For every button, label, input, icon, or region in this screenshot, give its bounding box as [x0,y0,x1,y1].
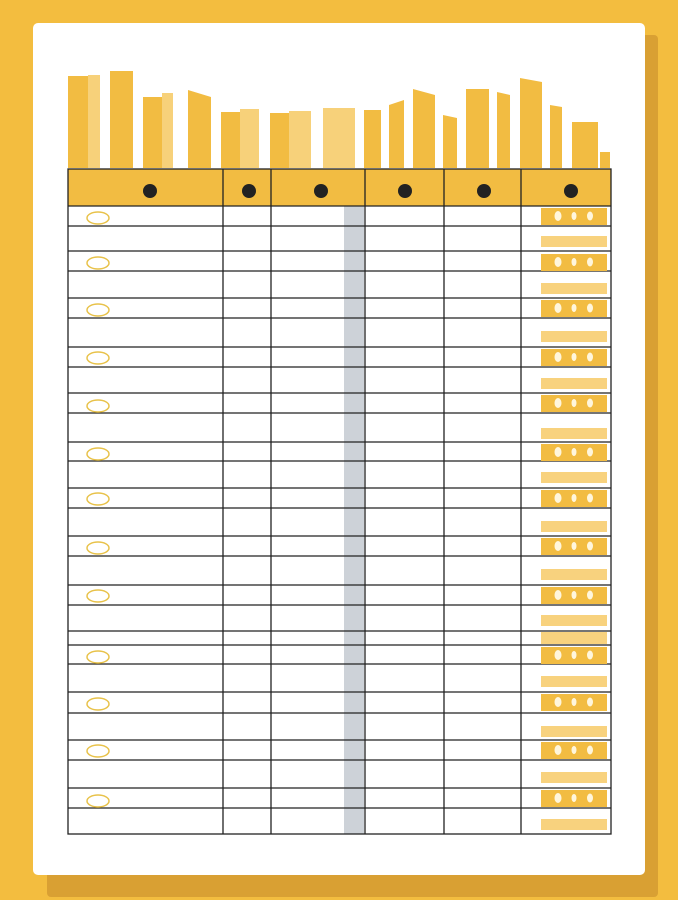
right column badges [541,208,607,830]
gray column band [344,206,364,834]
row icons: ovals [87,212,109,807]
table rows [68,169,611,834]
bar chart skyline [68,71,610,168]
table header [68,169,611,206]
